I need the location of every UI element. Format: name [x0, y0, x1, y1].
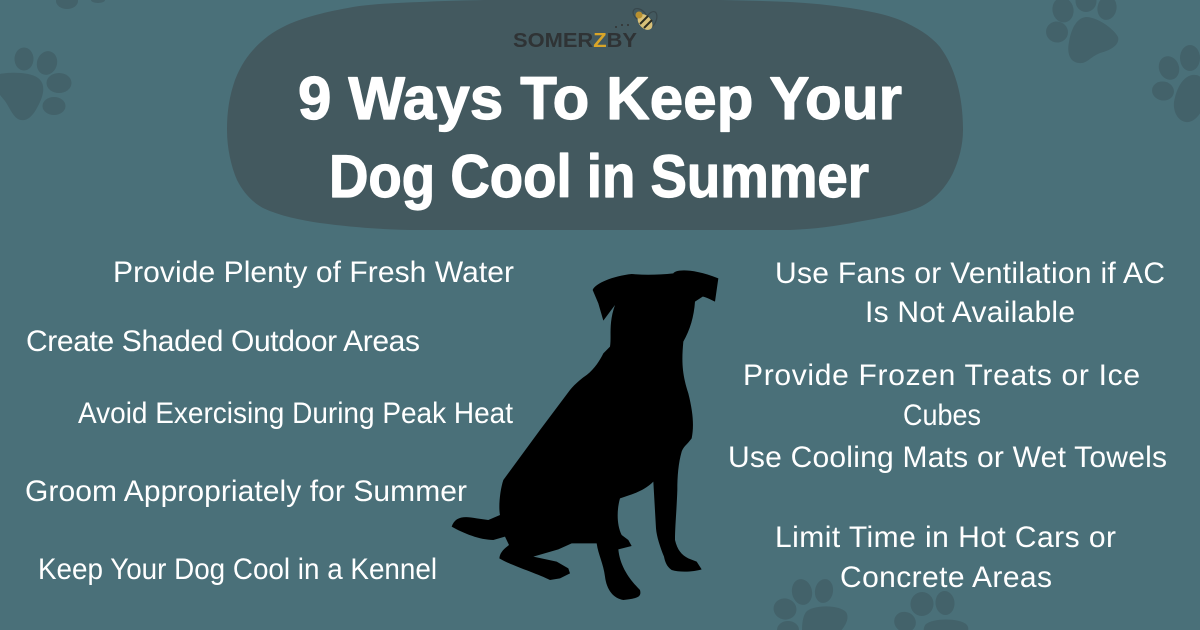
- text block: right tips: Limit Time in Hot Cars or: [775, 521, 1116, 554]
- text block: left tips: Provide Plenty of Fresh Water: [113, 256, 514, 289]
- logo: Somerzby: SOMER ZBY: [513, 30, 638, 52]
- text block: right tips: Use Cooling Mats or Wet Towels: [728, 441, 1167, 474]
- text block: left tips: Keep Your Dog Cool in a Kennel: [38, 553, 437, 586]
- text block: left tips: Avoid Exercising During Peak Heat: [78, 397, 514, 430]
- panel: title blob: [227, 0, 963, 230]
- text block: left tips: Groom Appropriately for Summer: [25, 475, 467, 508]
- text block: right tips: Use Fans or Ventilation if AC: [775, 257, 1165, 290]
- title: Dog Cool in Summer: [329, 143, 869, 210]
- text block: right tips: Concrete Areas: [840, 561, 1052, 594]
- text block: right tips: [728, 257, 1167, 594]
- icon: dog silhouette: [452, 270, 718, 600]
- title: [298, 65, 902, 210]
- text block: left tips: Create Shaded Outdoor Areas: [26, 325, 420, 358]
- text block: right tips: Provide Frozen Treats or Ice: [743, 359, 1140, 392]
- title: 9 Ways To Keep Your: [298, 65, 902, 132]
- logo: Somerzby: [513, 6, 659, 52]
- text block: right tips: Cubes: [903, 399, 981, 432]
- text block: left tips: [25, 256, 514, 586]
- icon: bee: [615, 6, 659, 33]
- text block: right tips: Is Not Available: [865, 296, 1075, 329]
